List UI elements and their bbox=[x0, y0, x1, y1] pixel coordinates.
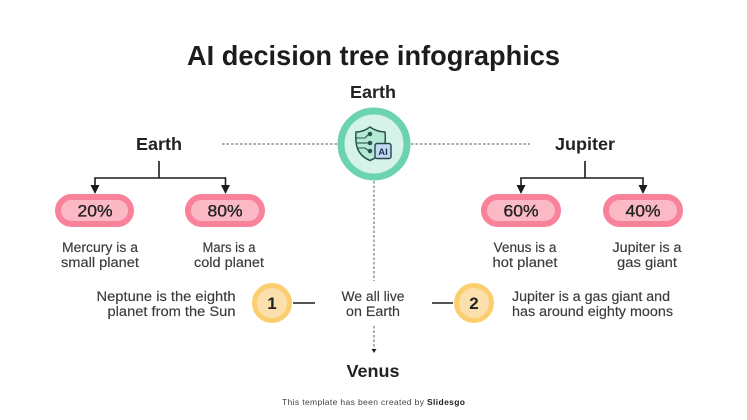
dotted connector: centre down bbox=[373, 181, 375, 281]
pill: 60%: 60% bbox=[504, 202, 538, 220]
pill: 20% bbox=[58, 197, 131, 224]
connector: badge 1 bbox=[293, 302, 315, 304]
icon: AI label: AI bbox=[378, 147, 388, 158]
tree connector: right bbox=[516, 161, 648, 194]
text: We all live: We all live bbox=[342, 289, 404, 304]
dotted connector: right bbox=[411, 143, 530, 145]
text: Mercury: Mercury is a bbox=[62, 240, 139, 255]
badge: 2 bbox=[456, 286, 492, 320]
text: Mercury: small planet bbox=[61, 255, 139, 270]
icon: shield bbox=[356, 127, 385, 160]
pill: 80% bbox=[188, 197, 262, 224]
text: Jupiter gas giant bbox=[512, 289, 673, 319]
dotted arrow: down to Venus bbox=[372, 326, 376, 353]
text: Venus: Venus is a bbox=[494, 240, 557, 255]
text: Jupiter bbox=[612, 240, 682, 270]
text: Jupiter: Jupiter is a bbox=[612, 240, 682, 255]
text: Neptune bbox=[96, 289, 236, 319]
pill: 40% bbox=[606, 197, 680, 224]
pill: 60% bbox=[484, 197, 558, 224]
text: We all live bbox=[342, 289, 404, 319]
branch heading: Earth: Earth bbox=[136, 134, 182, 154]
text: Jupiter gas giant: Jupiter is a gas giant and bbox=[512, 289, 670, 304]
badge: 1 bbox=[254, 286, 290, 320]
bottom label: Venus: Venus bbox=[346, 361, 400, 381]
central AI icon bbox=[341, 111, 407, 177]
branch heading: Jupiter: Jupiter bbox=[555, 134, 615, 154]
text: Mars: Mars is a bbox=[202, 240, 256, 255]
text: Mars bbox=[194, 240, 264, 270]
text: Jupiter gas giant: has around eighty moons bbox=[512, 304, 673, 319]
text: Mars: cold planet bbox=[194, 255, 264, 270]
pill: 20%: 20% bbox=[78, 202, 112, 220]
icon: circuit lines bbox=[356, 132, 372, 153]
pill: 40%: 40% bbox=[626, 202, 660, 220]
text: Venus: hot planet bbox=[492, 255, 558, 270]
tree connector: left bbox=[90, 161, 230, 194]
text: We all live: on Earth bbox=[346, 304, 400, 319]
pill: 80%: 80% bbox=[208, 202, 242, 220]
text: Neptune: Neptune is the eighth bbox=[96, 289, 236, 304]
badge: 1: 1 bbox=[267, 294, 277, 313]
title: AI decision tree infographics bbox=[187, 40, 560, 71]
top label: Earth: Earth bbox=[350, 82, 396, 102]
text: Jupiter: gas giant bbox=[617, 255, 677, 270]
badge: 2: 2 bbox=[469, 294, 479, 313]
footer credit: This template has been created by Slidesgo bbox=[282, 397, 465, 407]
text: Venus bbox=[492, 240, 558, 270]
icon: AI chip bbox=[375, 144, 391, 158]
text: Mercury bbox=[61, 240, 139, 270]
text: Neptune: planet from the Sun bbox=[108, 304, 236, 319]
dotted connector: left bbox=[222, 143, 338, 145]
connector: badge 2 bbox=[432, 302, 453, 304]
